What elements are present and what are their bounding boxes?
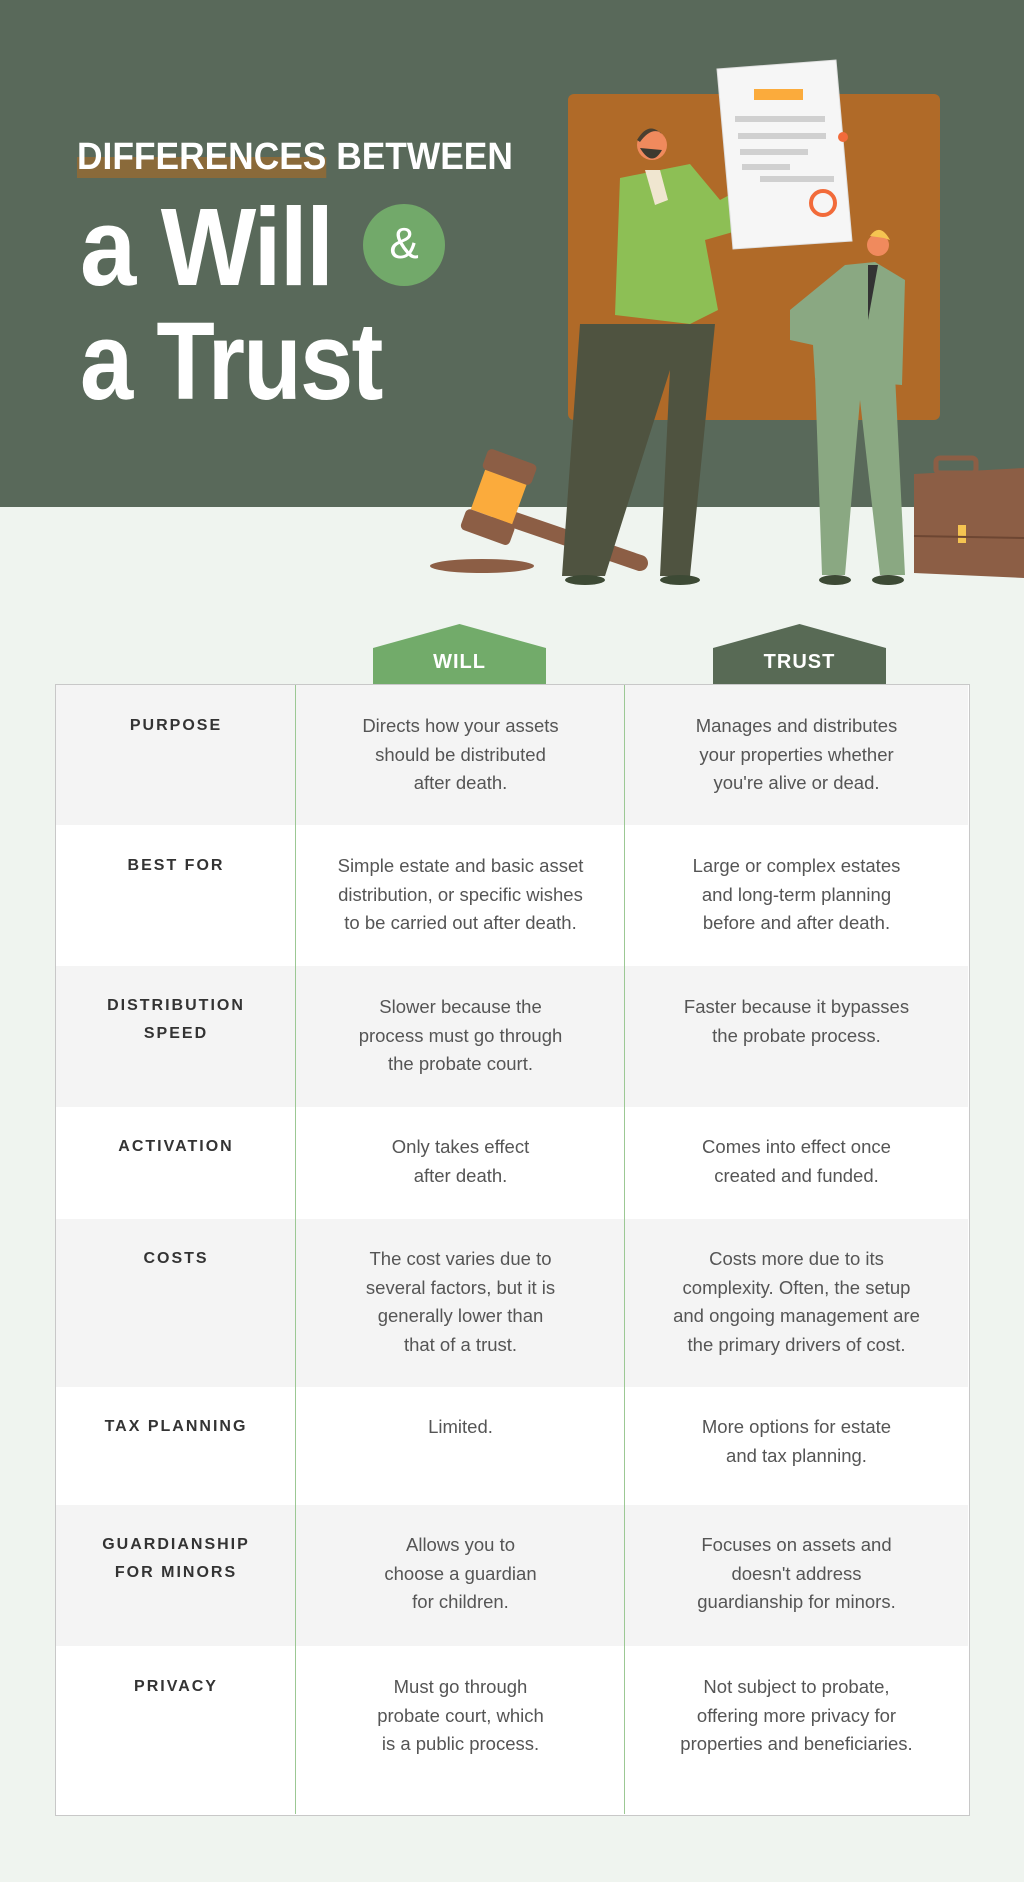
row: guardianship: guardianship for minors. <box>697 1591 896 1612</box>
title: differences between: DIFFERENCES BETWEEN <box>77 136 513 178</box>
gavel <box>430 448 640 573</box>
row: purpose: after death. <box>414 772 507 793</box>
tab: will: WILL <box>433 651 486 673</box>
row: tax planning: More options for estate <box>702 1416 891 1437</box>
row: distribution speed: SPEED <box>144 1025 208 1042</box>
row: distribution speed: Slower because the <box>379 996 542 1017</box>
comparison table <box>55 684 970 1816</box>
row: best for: and long-term planning <box>702 884 891 904</box>
row: guardianship: Allows you to <box>406 1534 515 1555</box>
row: privacy <box>134 1676 913 1754</box>
row: activation: Comes into effect once <box>702 1136 891 1157</box>
row: guardianship: FOR MINORS <box>115 1564 237 1581</box>
row: purpose: your properties whether <box>699 744 894 764</box>
row: purpose <box>56 685 968 825</box>
row: activation: ACTIVATION <box>118 1138 234 1155</box>
row: best for: Simple estate and basic asset <box>338 855 583 876</box>
row: privacy: probate court, which <box>377 1704 544 1726</box>
row: guardianship: for children. <box>412 1591 509 1612</box>
tab: trust <box>713 624 886 684</box>
tab: will <box>373 624 546 684</box>
row: costs: COSTS <box>143 1250 209 1267</box>
small man <box>790 230 905 585</box>
header background <box>0 0 1024 507</box>
row: costs: Costs more due to its <box>709 1248 884 1269</box>
row: distribution speed: the probate court. <box>388 1053 533 1074</box>
row: best for: Large or complex estates <box>693 855 900 876</box>
row: purpose: Manages and distributes <box>696 715 897 736</box>
row: privacy: is a public process. <box>382 1733 539 1754</box>
row: guardianship: choose a guardian <box>384 1562 537 1584</box>
row: distribution speed: the probate process. <box>712 1024 881 1046</box>
row: purpose: should be distributed <box>375 744 546 764</box>
illustration: lawyers with document <box>430 60 1024 585</box>
row: costs: generally lower than <box>378 1305 543 1326</box>
row: purpose: Directs how your assets <box>362 715 559 736</box>
row: privacy: PRIVACY <box>134 1678 218 1695</box>
row: purpose: you're alive or dead. <box>713 772 880 793</box>
row: activation: after death. <box>414 1164 507 1186</box>
row: tax planning: TAX PLANNING <box>105 1418 247 1435</box>
row: best for: BEST FOR <box>128 857 224 874</box>
row: purpose: PURPOSE <box>130 717 222 734</box>
row: privacy: Not subject to probate, <box>703 1676 890 1697</box>
paper <box>717 60 852 249</box>
row: distribution speed: Faster because it bypasses <box>684 996 909 1017</box>
row: guardianship: Focuses on assets and <box>701 1534 892 1555</box>
row: costs: and ongoing management are <box>673 1305 920 1326</box>
row: tax planning: Limited. <box>428 1416 493 1437</box>
row: tax planning <box>104 1416 891 1466</box>
row: best for: to be carried out after death. <box>344 912 577 933</box>
row: costs: The cost varies due to <box>369 1248 552 1269</box>
row: best for: before and after death. <box>703 912 890 933</box>
ampersand circle <box>363 204 445 286</box>
row: privacy: properties and beneficiaries. <box>680 1733 913 1754</box>
row: distribution speed <box>56 966 968 1107</box>
row: activation <box>118 1136 891 1186</box>
row: activation: created and funded. <box>714 1164 879 1186</box>
row: costs: that of a trust. <box>404 1334 517 1354</box>
row: costs <box>56 1219 968 1387</box>
board <box>568 94 940 420</box>
row: guardianship: doesn't address <box>731 1562 862 1584</box>
title: a Trust: a Trust <box>80 300 382 423</box>
row: activation: Only takes effect <box>392 1136 529 1157</box>
row: best for: distribution, or specific wishes <box>338 884 583 904</box>
row: distribution speed: DISTRIBUTION <box>107 997 245 1014</box>
row: guardianship <box>56 1505 968 1646</box>
row: best for <box>128 855 900 933</box>
tall man <box>562 128 758 585</box>
row: costs: the primary drivers of cost. <box>688 1334 905 1354</box>
row: privacy: Must go through <box>394 1676 527 1697</box>
ampersand circle: & <box>389 219 419 268</box>
row: costs: several factors, but it is <box>366 1276 555 1298</box>
tab: trust: TRUST <box>764 651 835 673</box>
title: a Will: a Will <box>80 186 332 309</box>
row: privacy: offering more privacy for <box>697 1704 896 1726</box>
briefcase <box>914 458 1024 578</box>
row: tax planning: and tax planning. <box>726 1444 867 1466</box>
row: distribution speed: process must go through <box>359 1024 562 1046</box>
row: guardianship: GUARDIANSHIP <box>102 1536 250 1553</box>
row: costs: complexity. Often, the setup <box>683 1276 910 1298</box>
